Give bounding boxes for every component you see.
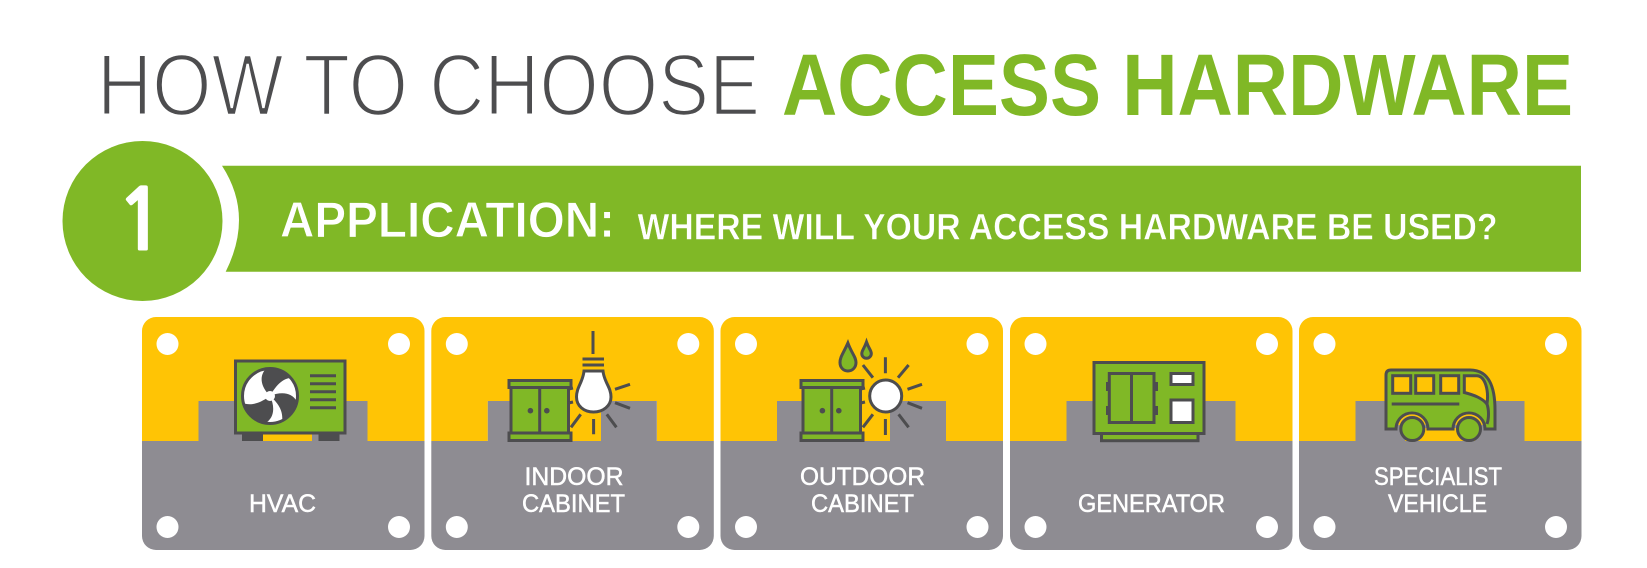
icon: HVAC unit [236,361,345,441]
label: specialist vehicle: SPECIALIST [1374,463,1502,491]
step number badge [62,141,222,301]
label: outdoor cabinet: CABINET [811,490,914,518]
icon: generator [1094,362,1204,441]
banner: application question: WHERE WILL YOUR ACCESS HARDWARE BE USED? [638,206,1498,248]
label: specialist vehicle: VEHICLE [1388,490,1487,518]
label: outdoor cabinet: OUTDOOR [800,463,925,491]
title [97,37,1573,134]
label: HVAC: HVAC [249,490,316,518]
label: indoor cabinet: CABINET [522,490,625,518]
icon: bus [1386,370,1495,441]
panel: generator [1010,317,1292,550]
panel: outdoor cabinet [720,317,1003,550]
panel: indoor cabinet [431,317,714,550]
title: HOW TO CHOOSE [97,37,760,134]
banner: application question: APPLICATION: [280,192,615,248]
icon: cabinet, sun and rain [801,342,922,441]
panel: specialist vehicle [1299,317,1582,550]
icon: cabinet and light bulb [509,331,630,441]
label: indoor cabinet: INDOOR [524,463,624,491]
banner: application question [222,166,1581,272]
step number badge: 1 [116,179,166,263]
label: generator: GENERATOR [1078,490,1225,518]
panel: HVAC [142,317,424,550]
